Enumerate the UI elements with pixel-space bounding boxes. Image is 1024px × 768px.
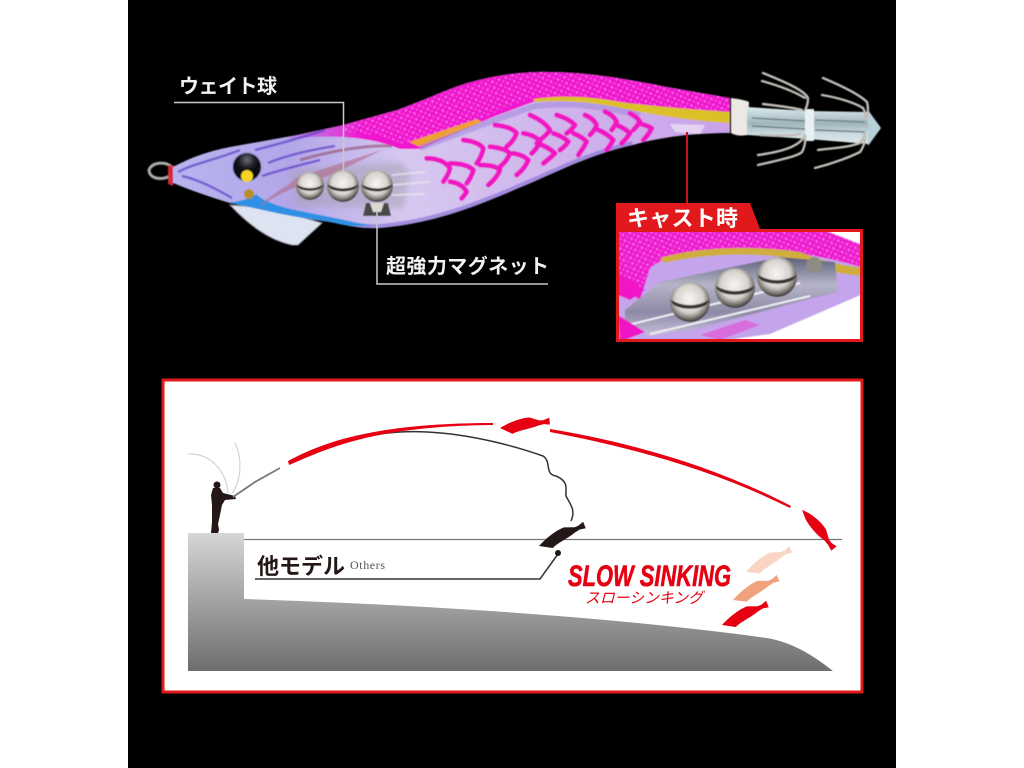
head streaks: [178, 130, 335, 198]
eye: [232, 152, 262, 182]
black jig: [536, 520, 588, 552]
magnet: [363, 203, 391, 216]
line eye ring: [149, 163, 172, 178]
inset: casting state: [610, 203, 865, 345]
others label: 他モデル: [257, 554, 345, 579]
frame: [616, 229, 863, 342]
callout: weight balls: [174, 75, 344, 172]
hooks: [758, 73, 868, 168]
pink scale pattern: [427, 112, 652, 198]
other model path: [296, 432, 573, 521]
water line: [244, 538, 842, 540]
weight balls: [296, 172, 324, 200]
silver weight chamber: [290, 162, 410, 208]
lower edge shading: [350, 141, 633, 228]
collar: [731, 98, 749, 136]
slow sinking label: SLOW SINKING: [568, 560, 731, 593]
sinking jig mid: [730, 573, 782, 606]
callout: weight balls: ウェイト球: [179, 75, 277, 98]
fishing rod: [233, 468, 280, 497]
sinking jig red: [719, 599, 771, 631]
slow sinking path: [288, 423, 791, 508]
pale tail patch: [670, 124, 705, 134]
orange stripe: [409, 119, 482, 147]
rod motion traces: [188, 443, 240, 494]
callout: magnet: [377, 212, 549, 284]
others label: [255, 550, 561, 579]
squid skirt: [747, 107, 868, 144]
slow sinking label: [568, 560, 731, 607]
red jig entering water: [799, 506, 838, 552]
callout: magnet: 超強力マグネット: [386, 254, 549, 278]
tab: [616, 203, 760, 229]
blue belly stripe: [228, 194, 372, 226]
lower fin: [230, 205, 322, 245]
black background panel: [128, 0, 896, 768]
gold stripe: [533, 97, 731, 123]
others label: Others: [350, 558, 385, 572]
ground profile: [188, 533, 833, 671]
squid jig lure: [149, 60, 881, 245]
panel: casting diagram: [163, 380, 862, 692]
angler silhouette: [211, 482, 236, 533]
red jig in flight: [499, 416, 550, 435]
pink back: [290, 71, 730, 150]
jig body: [172, 70, 731, 229]
wing streaks: [259, 146, 395, 207]
red leader line: [686, 132, 688, 204]
inset: casting state: キャスト時: [627, 206, 738, 231]
sinking jig pale: [743, 544, 795, 578]
slow sinking label: スローシンキング: [585, 590, 706, 607]
